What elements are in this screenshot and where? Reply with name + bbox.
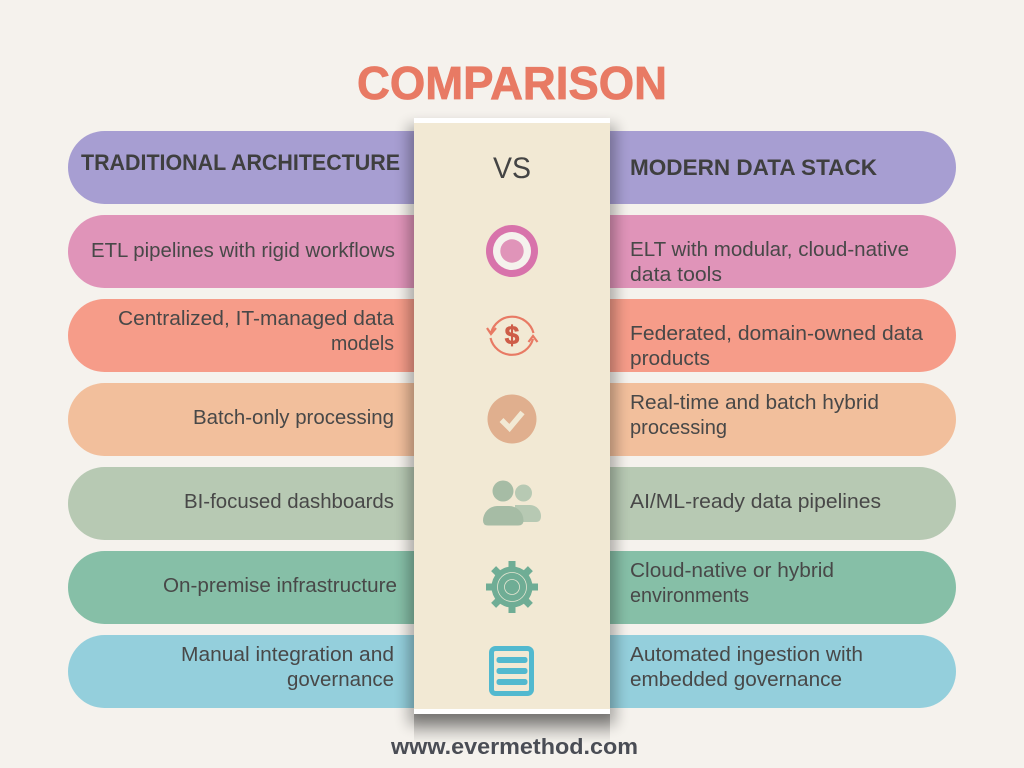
- right row: environments: environments: [630, 585, 749, 607]
- icon: dollar cycle: [487, 317, 538, 355]
- left row: pipelines: [68, 215, 468, 288]
- right row: data products: Federated, domain-owned data: [630, 323, 924, 345]
- right header pill: MODERN DATA STACK: [630, 155, 877, 180]
- left row: data models: Centralized, IT-managed data: [118, 308, 395, 330]
- right row: AI pipelines: [556, 467, 956, 540]
- icon: list document: [492, 648, 532, 694]
- right row: processing: [556, 383, 956, 456]
- icon: check circle: [488, 394, 536, 444]
- right row: AI pipelines: AI/ML-ready data pipelines: [630, 491, 881, 513]
- left row: dashboards: BI-focused dashboards: [184, 491, 394, 513]
- icon: gear: [486, 561, 538, 613]
- center panel shadow: [408, 125, 616, 744]
- left row: processing: [68, 383, 468, 456]
- title: COMPARISON: [357, 57, 667, 109]
- right row: governance: [556, 635, 956, 708]
- left row: governance: governance: [287, 669, 394, 691]
- left header pill: [68, 131, 468, 204]
- right row: environments: Cloud-native or hybrid: [630, 560, 834, 582]
- left row: governance: [68, 635, 468, 708]
- right row: processing: Real-time and batch hybrid: [630, 392, 879, 414]
- right row: governance: Automated ingestion with: [630, 644, 863, 666]
- right row: pipelines: data tools: [630, 264, 722, 286]
- panel: left column: [68, 131, 468, 708]
- icon: dollar cycle: $: [505, 320, 520, 350]
- right header pill: [556, 131, 956, 204]
- panel: right column: [556, 131, 956, 708]
- left header pill: TRADITIONAL ARCHITECTURE: [81, 150, 400, 175]
- left row: data models: [68, 299, 468, 372]
- right row: processing: processing: [630, 417, 727, 439]
- left row: infrastructure: On-premise infrastructure: [163, 575, 397, 597]
- right row: pipelines: [556, 215, 956, 288]
- left row: data models: models: [331, 333, 394, 355]
- left row: processing: Batch-only processing: [193, 407, 394, 429]
- right row: environments: [556, 551, 956, 624]
- right row: data products: [556, 299, 956, 372]
- right row: governance: embedded governance: [630, 669, 842, 691]
- icon: target: [486, 225, 538, 277]
- icon: people: [483, 480, 541, 526]
- left row: governance: Manual integration and: [181, 644, 394, 666]
- left row: infrastructure: [68, 551, 468, 624]
- center panel: [414, 118, 610, 714]
- footer URL: www.evermethod.com: [390, 734, 638, 759]
- right row: pipelines: ELT with modular, cloud-native: [630, 239, 909, 261]
- VS label: VS: [493, 152, 531, 185]
- left row: dashboards: [68, 467, 468, 540]
- left row: pipelines: ETL pipelines with rigid workflows: [91, 240, 395, 262]
- right row: data products: products: [630, 348, 710, 370]
